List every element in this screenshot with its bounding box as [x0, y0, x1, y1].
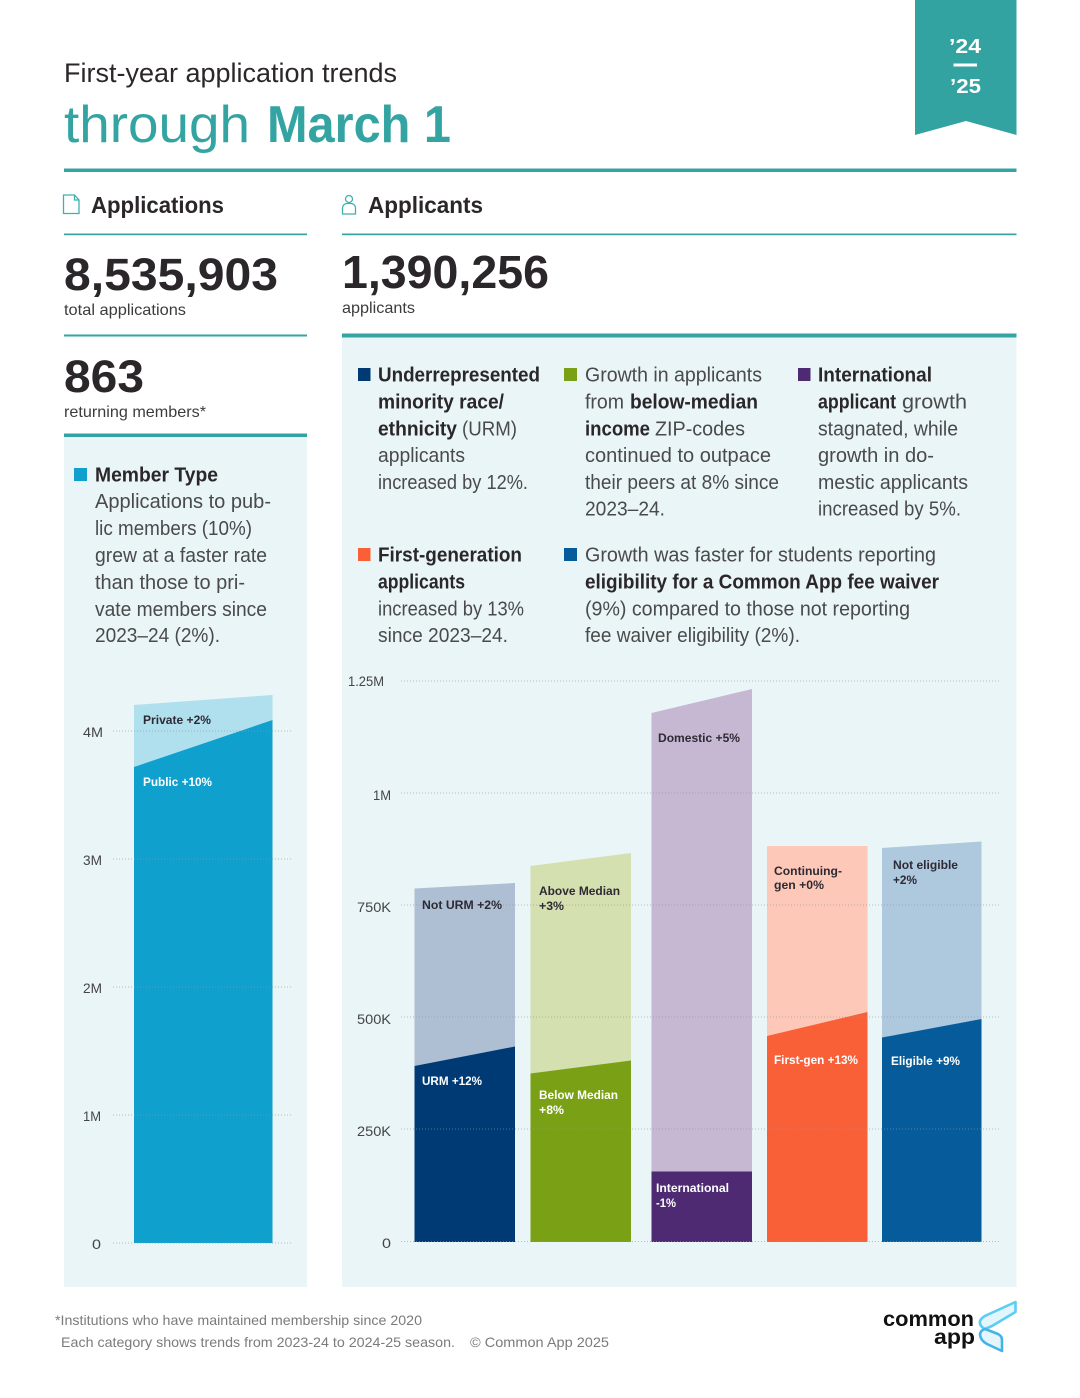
- logo: common app: common: [883, 1308, 974, 1331]
- icon: document: [64, 195, 79, 214]
- axis labels: 250K: [357, 1123, 392, 1139]
- bar labels: Not URM +2%: [422, 898, 502, 912]
- chart: applications by member type: 2M: [83, 980, 102, 996]
- chart: applications by member type: 1M: [83, 1108, 101, 1124]
- footnote: Each category shows trends from 2023-24 to 2024-25 season.: [61, 1334, 455, 1350]
- logo: common app: app: [934, 1326, 975, 1349]
- panel: member type: [64, 434, 307, 1287]
- stat: total applications: [64, 249, 278, 319]
- chart: applications by member type: Public +10%: [143, 775, 212, 789]
- bar labels: -1%: [656, 1196, 676, 1210]
- year ribbon badge: ’24: [949, 36, 982, 58]
- text block: URM: ethnicity: [378, 418, 458, 440]
- text block: international: International: [818, 364, 932, 386]
- text block: international: applicant: [818, 392, 896, 414]
- stat: total applications: total applications: [64, 302, 186, 319]
- axis labels: 1M: [373, 787, 391, 803]
- text block: fee waiver: [564, 544, 939, 647]
- text block: international: growth in do-: [818, 445, 934, 467]
- axis labels: 750K: [357, 899, 392, 915]
- footnote: *Institutions who have maintained membership since 2020: [55, 1312, 422, 1328]
- main title: through: [64, 96, 250, 154]
- bar labels: +3%: [539, 899, 564, 913]
- bar: residency: [652, 689, 752, 1242]
- bar labels: gen +0%: [774, 878, 824, 892]
- text block: below-median income: below-median: [630, 392, 758, 414]
- logo: common app: [883, 1302, 1016, 1351]
- text block: fee waiver: Growth was faster for students reporting: [585, 544, 936, 566]
- text block: fee waiver: (9%) compared to those not reporting: [585, 598, 910, 620]
- bar labels: First-gen +13%: [774, 1053, 858, 1067]
- bar labels: Above Median: [539, 884, 620, 898]
- chart: applications by member type: [83, 695, 293, 1252]
- text block: first-generation: since 2023–24.: [378, 625, 508, 647]
- stat: applicants: applicants: [342, 300, 415, 317]
- chart: applicants by category: [348, 673, 999, 1251]
- text block: international: [798, 364, 968, 520]
- main title: March 1: [267, 96, 451, 154]
- subtitle: First-year application trends: [64, 58, 397, 88]
- bar labels: Domestic +5%: [658, 731, 740, 745]
- stat: applicants: 1,390,256: [342, 246, 549, 298]
- text block: below-median income: continued to outpace: [585, 445, 771, 467]
- text block: first-generation: applicants: [378, 572, 465, 594]
- panel: applicant trends: [342, 334, 1016, 1287]
- bar labels: Eligible +9%: [891, 1054, 960, 1068]
- legend: member type text: 2023–24 (2%).: [95, 625, 220, 647]
- legend: member type text: vate members since: [95, 599, 267, 621]
- chart: applications by member type: 4M: [83, 724, 103, 740]
- text block: international: growth: [902, 392, 967, 414]
- text block: fee waiver: fee waiver eligibility (2%).: [585, 625, 800, 647]
- text block: fee waiver: eligibility for a Common App fee waiver: [585, 572, 939, 594]
- legend: member type text: lic members (10%): [95, 518, 252, 540]
- text block: below-median income: 2023–24.: [585, 498, 665, 520]
- footnote: [55, 1312, 609, 1350]
- heading: applicants: Applicants: [368, 192, 483, 218]
- bar: fee waiver: [882, 842, 982, 1242]
- main title: [64, 96, 451, 154]
- text block: below-median income: income: [585, 418, 650, 440]
- text block: first-generation: increased by 13%: [378, 598, 524, 620]
- chart: applications by member type: 3M: [83, 852, 102, 868]
- stat: returning members: [64, 351, 206, 421]
- chart: applications by member type: Private +2%: [143, 713, 211, 727]
- legend: member type text: Applications to pub-: [95, 491, 271, 513]
- bar labels: URM +12%: [422, 1074, 482, 1088]
- text block: below-median income: ZIP-codes: [655, 418, 745, 440]
- bar labels: +8%: [539, 1103, 564, 1117]
- year ribbon badge: ’25: [950, 76, 981, 98]
- text block: first-generation: First-generation: [378, 544, 522, 566]
- legend: member type text: [74, 464, 271, 647]
- text block: international: mestic applicants: [818, 472, 968, 494]
- chart: applications by member type: 0: [92, 1236, 101, 1252]
- bar labels: International: [656, 1181, 729, 1195]
- heading: applications: Applications: [91, 192, 224, 218]
- text block: URM: minority race/: [378, 392, 504, 414]
- text block: URM: (URM): [462, 418, 517, 440]
- text block: below-median income: Growth in applicants: [585, 364, 762, 386]
- text block: URM: [358, 364, 540, 494]
- text block: international: increased by 5%.: [818, 498, 961, 520]
- stat: returning members: 863: [64, 351, 144, 402]
- footnote: © Common App 2025: [470, 1334, 609, 1350]
- panel: applicants column header: [342, 192, 483, 218]
- stat: returning members: returning members*: [64, 404, 206, 421]
- axis labels: 0: [382, 1235, 391, 1251]
- axis labels: [348, 673, 392, 1251]
- text block: URM: applicants: [378, 445, 465, 467]
- bar labels: Not eligible: [893, 858, 958, 872]
- title block: [64, 58, 451, 154]
- text block: URM: Underrepresented: [378, 364, 540, 386]
- bar labels: [422, 731, 960, 1210]
- text block: first-generation: [358, 544, 524, 647]
- text block: below-median income: [564, 364, 779, 520]
- text block: URM: increased by 12%.: [378, 472, 528, 494]
- bar: generation: [767, 846, 868, 1242]
- stat: total applications: 8,535,903: [64, 249, 278, 300]
- icon: logo wings: [980, 1302, 1016, 1351]
- bar labels: +2%: [893, 873, 917, 887]
- bar labels: Below Median: [539, 1088, 618, 1102]
- text block: below-median income: their peers at 8% since: [585, 472, 779, 494]
- bar: income: [530, 853, 631, 1242]
- year ribbon badge: [915, 0, 1016, 135]
- axis labels: 500K: [357, 1011, 392, 1027]
- legend: member type text: grew at a faster rate: [95, 545, 267, 567]
- bar labels: Continuing-: [774, 864, 842, 878]
- legend: member type text: than those to pri-: [95, 572, 245, 594]
- text block: below-median income: from: [585, 392, 624, 414]
- bar: URM: [414, 883, 515, 1242]
- axis labels: 1.25M: [348, 673, 384, 689]
- panel: applications column header: [64, 192, 224, 218]
- legend: member type text: Member Type: [95, 464, 218, 486]
- text block: international: stagnated, while: [818, 418, 958, 440]
- icon: person: [342, 196, 356, 214]
